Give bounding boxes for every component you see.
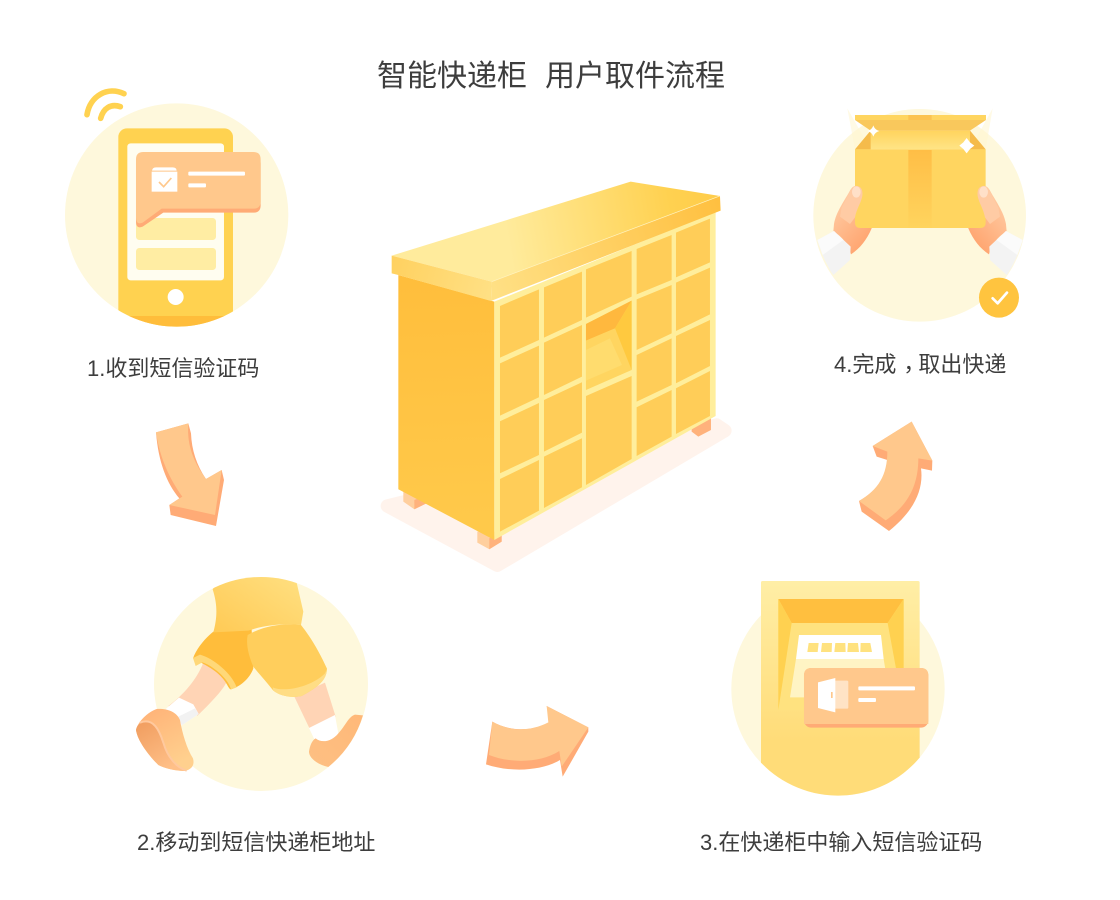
icon: left thumb [840,186,862,224]
title: 用户取件流程 [545,60,725,93]
arrow: step 2 to step 3 [486,706,588,777]
icon: left hand [817,189,873,275]
front shoe [309,715,363,767]
front leg skin [294,683,336,729]
front short leg [247,624,327,697]
icon: sparkles [868,125,974,153]
label: step 4: 4.完成 [834,352,896,377]
back leg skin [168,663,228,716]
icon: walking legs [136,570,363,771]
icon: wifi signal [87,91,124,118]
back shoe [136,709,194,771]
icon: background circle [731,582,945,796]
locker doors [500,219,710,532]
icon: background circle [813,109,1026,322]
floor shadow [387,425,725,565]
cabinet front frame [494,212,716,540]
icon: right thumb [978,186,1000,224]
back sock [166,698,199,725]
open locker door [586,301,632,390]
title: 智能快递柜 [377,60,527,93]
label: step 4: ， [903,351,925,376]
icon: check badge [979,278,1019,318]
icon: open box [855,115,986,228]
arrow: step 4 pointer up [859,422,932,531]
label: step 4: 取出快递 [918,352,1006,377]
label: step 1: 1.收到短信验证码 [87,356,259,381]
cabinet top [392,182,721,301]
icon: background circle [154,577,368,791]
icon: phone [118,128,233,342]
panel: step 3 enter code [731,581,945,796]
icon: right hand [967,189,1023,275]
icon: background circle [65,103,288,327]
panel: step 1 receive SMS [65,91,288,342]
cabinet side [398,275,494,540]
icon: light glow [847,108,993,149]
callout: code card [804,668,928,728]
panel: step 4 pick up parcel [813,108,1026,322]
back short leg [193,629,253,689]
icon: locker machine [761,581,920,796]
panel: locker cabinet [387,182,725,565]
label: step 3: 3.在快递柜中输入短信验证码 [700,830,982,855]
arrow: step 1 to step 2 [156,423,224,526]
callout: SMS bubble [136,152,261,227]
front sock [309,715,338,742]
icon: machine recess [778,599,904,710]
waist [212,577,304,632]
label: step 2: 2.移动到短信快递柜地址 [137,830,375,855]
cabinet feet [403,418,711,549]
panel: step 2 walking [136,570,368,791]
